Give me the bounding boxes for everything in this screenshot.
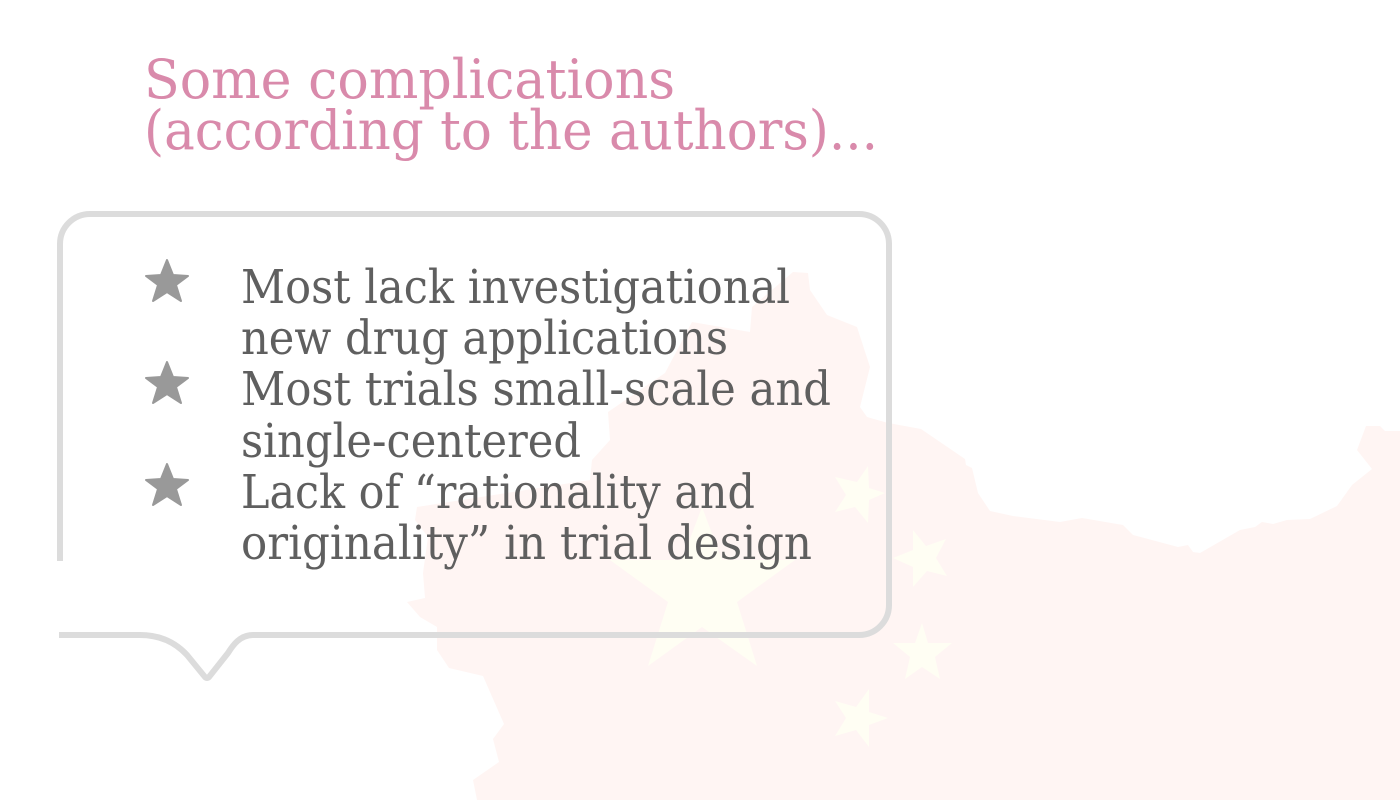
- item 3 text: [241, 465, 812, 571]
- item 1 text: new drug applications: [241, 311, 728, 366]
- map silhouette: [407, 272, 1400, 800]
- small flag star 2: [893, 530, 947, 587]
- item 2 text: single-centered: [241, 414, 581, 469]
- item 3 text: Lack of “rationality and: [241, 465, 755, 520]
- icon: star bullet 3: [146, 464, 188, 505]
- item 2: [146, 362, 831, 469]
- small flag star 4: [835, 689, 888, 747]
- map of China with flag stars: [407, 272, 1400, 800]
- item 2 text: [241, 362, 831, 469]
- list of complications: [146, 260, 831, 571]
- heading: Some complications: [144, 48, 675, 111]
- item 3 text: originality” in trial design: [241, 516, 812, 571]
- item 2 text: Most trials small-scale and: [241, 362, 831, 417]
- large flag star: [610, 507, 795, 666]
- heading: [144, 48, 878, 162]
- item 1 text: [241, 260, 790, 366]
- item 3: [146, 464, 812, 571]
- heading: (according to the authors)...: [144, 99, 878, 162]
- icon: star bullet 2: [146, 362, 188, 403]
- item 1: [146, 260, 790, 366]
- icon: star bullet 1: [146, 260, 188, 301]
- small flag star 3: [893, 623, 952, 679]
- item 1 text: Most lack investigational: [241, 260, 790, 315]
- small flag star 1: [835, 466, 885, 523]
- speech bubble outline: [59, 214, 889, 678]
